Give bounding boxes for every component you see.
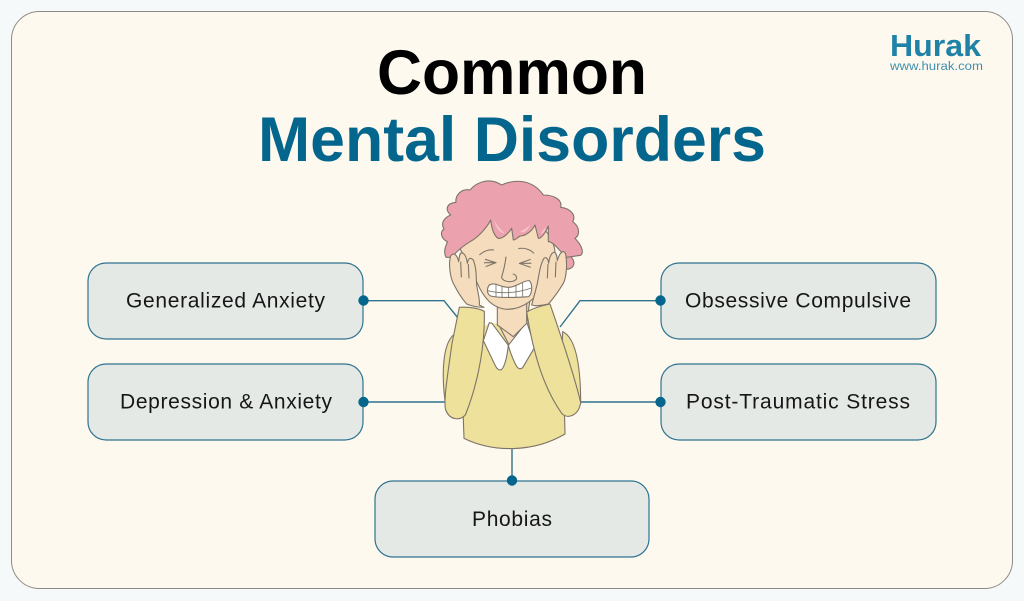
face (460, 213, 555, 309)
head (442, 181, 582, 337)
hair (442, 181, 582, 257)
left hand (450, 253, 484, 307)
torso and arms (443, 300, 581, 449)
illustration: stressed person (442, 181, 582, 449)
right collar (508, 322, 535, 369)
title (258, 38, 766, 175)
sweater body (463, 320, 565, 449)
box: Generalized Anxiety (88, 263, 363, 339)
box: Obsessive Compulsive: Obsessive Compulsive (685, 290, 911, 312)
eyebrows (479, 248, 534, 255)
box: Phobias (375, 481, 649, 557)
left sleeve (445, 307, 484, 419)
logo (889, 28, 983, 73)
back collar (484, 303, 498, 327)
hair highlights (494, 220, 546, 233)
connector lines (363, 301, 660, 480)
back of left arm (443, 335, 467, 403)
mouth (487, 281, 532, 297)
left collar (483, 323, 508, 370)
box: Post-Traumatic Stress (661, 364, 936, 440)
connector dots (358, 295, 666, 486)
box: Obsessive Compulsive (661, 263, 936, 339)
back of right arm (560, 332, 581, 403)
logo url: www.hurak.com (889, 61, 983, 73)
left eye (484, 259, 496, 267)
box: Generalized Anxiety: Generalized Anxiety (126, 290, 326, 312)
title line 1: Common (377, 38, 647, 108)
back hair tuft (560, 253, 574, 269)
box: Post-Traumatic Stress: Post-Traumatic Stress (686, 390, 910, 414)
logo wordmark: Hurak (890, 28, 982, 63)
box: Depression & Anxiety: Depression & Anxiety (120, 390, 332, 414)
left fingers (461, 262, 469, 278)
box: Phobias: Phobias (472, 508, 552, 531)
teeth (487, 281, 532, 298)
neck (498, 300, 530, 345)
box: Depression & Anxiety (88, 364, 363, 440)
right eye (519, 259, 531, 267)
neck upper (497, 303, 527, 337)
title line 2: Mental Disorders (258, 105, 766, 175)
right fingers (547, 262, 556, 278)
nose (502, 257, 517, 282)
right hand (532, 252, 567, 306)
right sleeve (527, 304, 581, 416)
